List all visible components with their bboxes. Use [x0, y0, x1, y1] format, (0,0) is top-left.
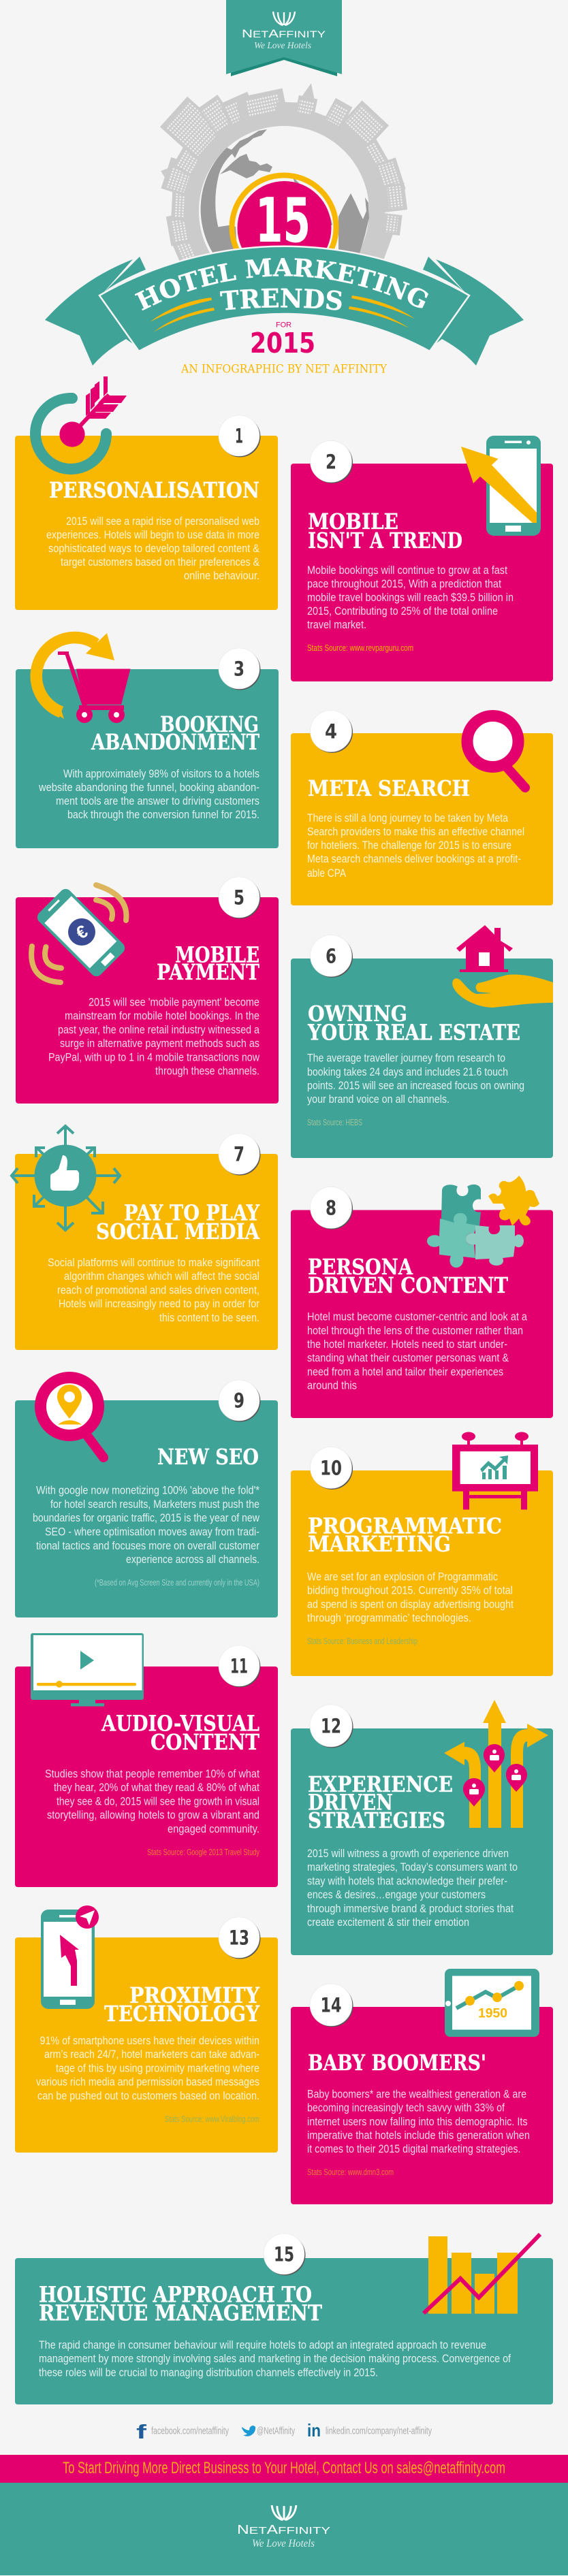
number badge 15: 15: [274, 2242, 294, 2266]
body text: sophisticated ways to develop tailored content &: [48, 543, 259, 555]
ribbon banner: [45, 245, 524, 366]
number badge 5: 5: [234, 886, 244, 909]
hero illustration: city ring and globe: [156, 81, 407, 312]
heading: PERSONA: [308, 1255, 413, 1280]
heading: BABY BOOMERS': [308, 2050, 486, 2076]
heading: SOCIAL MEDIA: [96, 1219, 259, 1244]
body text: [36, 2035, 259, 2102]
icon: tablet with chart: [445, 1969, 539, 2037]
heading: CONTENT: [151, 1730, 259, 1755]
heading: DRIVEN CONTENT: [308, 1273, 508, 1298]
social links row: @NetAffinity: [257, 2426, 295, 2437]
body text: [45, 1768, 259, 1835]
heading: PROGRAMMATIC: [308, 1514, 502, 1539]
body text: your brand voice on all channels.: [307, 1093, 449, 1106]
body text: internet users now falling into this demographic. Its: [307, 2116, 528, 2128]
heading: [101, 1711, 259, 1755]
body text: points. 2015 will see an increased focus on owning: [307, 1080, 524, 1092]
icon: tablet with chart: 1950: [478, 2007, 507, 2021]
body text: standing what their customer personas want &: [307, 1352, 509, 1364]
heading: MARKETING: [308, 1532, 451, 1557]
body text: Studies show that people remember 10% of what: [45, 1768, 259, 1780]
body text: tage of this by using proximity marketing where: [56, 2062, 259, 2074]
icon: magnifier: [467, 716, 525, 788]
heading: [39, 2283, 322, 2326]
number badge 9: 9: [234, 1389, 244, 1412]
panel 14: baby boomers: [291, 1969, 553, 2204]
body text: ment tools are the answer to driving customers: [56, 795, 259, 807]
number badge 2: [311, 441, 353, 483]
heading: [104, 1983, 259, 2027]
icon: puzzle pieces: [427, 1176, 539, 1268]
body text: Search providers to make this an effective channel: [307, 826, 524, 838]
body text: [33, 1485, 260, 1566]
heading: ABANDONMENT: [91, 730, 259, 755]
number badge 13: 13: [229, 1927, 249, 1950]
panel 2: mobile isn't a trend: [291, 436, 553, 681]
body text: various rich media and permission based messages: [36, 2076, 259, 2089]
body text: With google now monetizing 100% 'above the fold'*: [36, 1485, 260, 1497]
heading: META SEARCH: [308, 776, 470, 801]
badge: 15: [232, 176, 336, 279]
icon: logo fan: [273, 12, 295, 25]
body text: PayPal, with up to 1 in 4 mobile transactions now: [48, 1051, 259, 1063]
number badge 13: [219, 1917, 260, 1959]
body text: website abandoning the funnel, booking abandon-: [38, 782, 259, 794]
number badge 11: [219, 1645, 260, 1687]
body text: back through the conversion funnel for 2015.: [67, 809, 259, 821]
heading: PAY TO PLAY: [124, 1201, 259, 1225]
number badge 2: 2: [326, 451, 336, 474]
logo wordmark: N ET AFFINITY: [242, 27, 326, 40]
number badge 10: [311, 1447, 353, 1490]
icon: phone with arrow: [461, 436, 541, 536]
body text: online behaviour.: [184, 570, 259, 582]
icon: branching arrows with pins: [444, 1700, 548, 1828]
body text: experience across all channels.: [126, 1553, 259, 1566]
body text: marketing strategies, Today’s consumers want to: [307, 1861, 518, 1873]
body text: this content to be seen.: [159, 1312, 259, 1324]
globe continents: [201, 129, 369, 259]
heading: MOBILE: [308, 509, 398, 534]
number badge 9: [219, 1380, 260, 1421]
number badge 1: 1: [235, 425, 243, 448]
icon: tilted phone with euro: €: [72, 920, 91, 944]
number badge 12: [310, 1705, 353, 1748]
footer logo block: [0, 2483, 568, 2575]
number badge 3: 3: [234, 658, 244, 681]
subtitle: for: FOR: [276, 321, 291, 329]
body text: need from a hotel and tailor their experiences: [307, 1366, 503, 1378]
number badge 6: [311, 935, 353, 978]
body text: the hotel marketer. Hotels need to start under-: [307, 1338, 507, 1351]
body text: 91% of smartphone users have their devices within: [40, 2035, 259, 2047]
icon: twitter: [242, 2426, 255, 2436]
subtitle: 2015: 2015: [250, 327, 315, 359]
body text: for hoteliers. The challenge for 2015 is to ensure: [307, 839, 511, 852]
heading: PAYMENT: [157, 960, 259, 985]
heading: MOBILE: [175, 942, 259, 968]
number badge 8: 8: [326, 1197, 336, 1220]
icon: phone with navigation arrow: [41, 1905, 99, 2009]
body text: storytelling, allowing hotels to grow a vibrant and: [47, 1809, 259, 1822]
heading: TECHNOLOGY: [104, 2001, 259, 2027]
body text: through these channels.: [155, 1065, 259, 1077]
body text: past year, the online retail industry witnessed a: [58, 1024, 260, 1036]
icon: bar chart with trend line: [424, 2234, 540, 2314]
panel 4: meta search: [291, 711, 553, 905]
body text: [307, 1848, 518, 1929]
social links row: linkedin.com/company/net-affinity: [326, 2426, 432, 2437]
body text: algorithm changes which will affect the social: [64, 1270, 259, 1283]
body text: [307, 1571, 514, 1624]
body text: travel market.: [307, 619, 366, 631]
panel 10: programmatic marketing: [291, 1432, 553, 1676]
body text: [307, 1311, 528, 1392]
number badge 1: [219, 415, 260, 457]
icon: linkedin: in: [307, 2420, 321, 2441]
icon: target and arrow: [35, 376, 127, 469]
stats source: Stats Source: www.revparguru.com: [307, 643, 413, 653]
heading: OWNING: [308, 1001, 407, 1027]
body text: create excitement & stir their emotion: [307, 1916, 469, 1929]
body text: arm’s reach 24/7, hotel marketers can take advan-: [44, 2048, 259, 2061]
heading: HOLISTIC APPROACH TO: [39, 2283, 312, 2308]
number badge 14: 14: [320, 1993, 342, 2016]
panel 13: proximity technology: [15, 1905, 278, 2153]
number badge 11: 11: [230, 1654, 248, 1677]
panel 5: mobile payment: [16, 877, 279, 1104]
number badge 12: 12: [321, 1714, 341, 1737]
number badge 15: [264, 2234, 305, 2275]
heading: [308, 1255, 508, 1298]
body text: 2015 will witness a growth of experience driven: [307, 1848, 509, 1860]
body text: 2015 will see 'mobile payment' become: [89, 997, 259, 1009]
title: hotel marketing: [142, 276, 425, 311]
body text: [39, 2339, 511, 2379]
body text: Baby boomers* are the wealthiest generation & are: [307, 2088, 526, 2100]
heading: [157, 942, 259, 985]
body text: Hotel must become customer-centric and look at a: [307, 1311, 528, 1323]
heading: REVENUE MANAGEMENT: [39, 2301, 322, 2326]
body text: Hotels will increasingly need to pay in order for: [59, 1298, 259, 1310]
body text: becoming increasingly tech savvy with 33% of: [307, 2102, 505, 2114]
heading: AUDIO-VISUAL: [101, 1711, 259, 1736]
number badge 4: [311, 711, 353, 753]
body text: target customers based on their preferences &: [61, 556, 259, 568]
body text: around this: [307, 1380, 357, 1392]
body text: pace throughout 2015, With a prediction that: [307, 578, 501, 590]
ribbon banner: TRENDS: [219, 289, 342, 310]
stats source: Stats Source: Business and Leadership: [307, 1637, 417, 1646]
body text: surge in alternative payment methods such as: [60, 1037, 259, 1050]
body text: [38, 768, 259, 821]
body text: boundaries for organic traffic, 2015 is the year of new: [33, 1512, 259, 1524]
number badge 5: [219, 877, 260, 919]
body text: The average traveller journey from research to: [307, 1052, 505, 1065]
body text: for hotel search results, Marketers must push the: [50, 1498, 259, 1511]
body text: [307, 812, 524, 880]
icon: video monitor: [31, 1633, 144, 1706]
body text: it comes to their 2015 digital marketing strategies.: [307, 2143, 520, 2155]
body text: Social platforms will continue to make significant: [48, 1257, 259, 1269]
body text: imperative that hotels include this generation when: [307, 2129, 530, 2142]
panel 3: booking abandonment: [16, 633, 279, 848]
body text: they see & do, 2015 will see the growth in visual: [57, 1795, 259, 1807]
ribbon banner: HOTEL MARKETING: [135, 258, 428, 310]
icon: house on hand: [452, 925, 553, 1008]
body text: experiences. Hotels will begin to use data in more: [46, 529, 259, 541]
body text: hotel through the lens of the customer rather than: [307, 1325, 523, 1337]
body text: can be pushed out to customers based on location.: [37, 2090, 259, 2102]
body text: they hear, 20% of what they read & 80% of what: [54, 1782, 259, 1794]
heading: YOUR REAL ESTATE: [307, 1020, 520, 1046]
number badge 3: [219, 648, 260, 690]
number badge 6: 6: [326, 945, 336, 968]
body text: tional tactics and focuses more on overall customer: [36, 1540, 259, 1552]
footnote: (*Based on Avg Screen Size and currently only in the USA): [95, 1578, 259, 1588]
body text: [307, 564, 514, 631]
number badge 7: 7: [234, 1142, 244, 1165]
body text: Meta search channels deliver bookings at a profit-: [307, 853, 521, 865]
heading: [91, 712, 259, 755]
panel 12: experience driven strategies: [291, 1700, 553, 1955]
panel 1: personalisation: [15, 376, 278, 610]
body text: [307, 2088, 530, 2155]
icon: thumbs up with arrows: [11, 1125, 121, 1231]
logo wordmark: N ET A FFINITY: [237, 2523, 330, 2537]
social links row: [136, 2420, 432, 2443]
icon: tilted phone with euro: [31, 885, 127, 982]
body text: reach of promotional and sales driven content,: [57, 1284, 259, 1296]
body text: through ‘programmatic’ technologies.: [307, 1612, 471, 1624]
number badge 14: [310, 1984, 353, 2027]
number badge 10: 10: [320, 1457, 342, 1480]
body text: The rapid change in consumer behaviour will require hotels to adopt an integrated approach to revenue: [39, 2339, 486, 2351]
panel 7: pay to play social media: [11, 1125, 278, 1350]
panel 9: new seo: [15, 1378, 278, 1617]
heading: PROXIMITY: [129, 1983, 259, 2008]
body text: management by more strongly involving sales and marketing in the decision making process. Convergence of: [39, 2353, 511, 2365]
number badge 8: [311, 1187, 353, 1229]
heading: PERSONALISATION: [49, 478, 259, 503]
logo tagline: We Love Hotels: [254, 41, 312, 51]
stats source: Stats Source: Google 2013 Travel Study: [147, 1848, 260, 1857]
panel 6: owning your real estate: [291, 925, 553, 1158]
icon: cart with return arrow: [36, 633, 130, 723]
icon: facebook: f: [136, 2421, 147, 2443]
panel 15: holistic approach to revenue management: [15, 2234, 553, 2404]
title: trends: [221, 308, 343, 310]
body text: We are set for an explosion of Programmatic: [307, 1571, 498, 1583]
heading: [308, 1514, 502, 1557]
number badge 4: 4: [325, 720, 337, 743]
stats source: Stats Source: HEBS: [307, 1118, 362, 1127]
heading: EXPERIENCE: [308, 1772, 453, 1797]
body text: 2015 will see a rapid rise of personalised web: [66, 515, 259, 528]
body text: [46, 515, 259, 582]
body text: mobile travel bookings will reach $39.5 billion in: [307, 592, 514, 604]
body text: 2015, Contributing to 25% of the total online: [307, 605, 498, 617]
body text: [307, 1052, 524, 1106]
logo tagline: We Love Hotels: [252, 2538, 315, 2549]
stats source: Stats Source: www.dmn3.com: [307, 2168, 394, 2177]
body text: ad spend is spent on display advertising bought: [307, 1598, 514, 1611]
body text: engaged community.: [168, 1823, 259, 1835]
body text: these roles will be crucial to managing distribution channels effectively in 2015.: [39, 2366, 378, 2379]
body text: booking takes 24 days and includes 21.6 touch: [307, 1066, 508, 1078]
heading: BOOKING: [160, 712, 259, 737]
body text: There is still a long journey to be taken by Meta: [307, 812, 509, 824]
icon: magnifier with pin: [41, 1378, 104, 1458]
body text: Mobile bookings will continue to grow at a fast: [307, 564, 507, 577]
body text: SEO - where optimisation moves away from tradi-: [45, 1526, 259, 1539]
panel 11: audio-visual content: [15, 1633, 278, 1887]
body text: stay with hotels that acknowledge their prefer-: [307, 1875, 507, 1887]
subtitle: by net affinity: AN INFOGRAPHIC BY NET AFFINITY: [180, 362, 388, 376]
heading: [307, 1001, 520, 1046]
number badge 7: [219, 1133, 260, 1175]
heading: [96, 1201, 259, 1244]
body text: bidding throughout 2015. Currently 35% of total: [307, 1585, 513, 1597]
stats source: Stats Source: www.Viralblog.com: [165, 2114, 259, 2124]
body text: [48, 997, 260, 1077]
top logo banner: [226, 0, 342, 76]
heading: [308, 1772, 453, 1833]
body text: mainstream for mobile hotel bookings. In the: [65, 1010, 259, 1023]
body text: through immersive brand & product stories that: [307, 1903, 514, 1915]
heading: STRATEGIES: [308, 1808, 445, 1833]
badge: 15: 15: [255, 185, 311, 257]
icon: logo fan: [272, 2505, 296, 2520]
heading: DRIVEN: [308, 1790, 393, 1816]
panel 8: persona driven content: [291, 1176, 553, 1418]
body text: able CPA: [307, 867, 346, 880]
social links row: facebook.com/netaffinity: [151, 2426, 229, 2437]
call to action bar: [0, 2455, 568, 2483]
heading: [308, 509, 462, 553]
body text: [48, 1257, 259, 1324]
icon: billboard chart: [452, 1432, 538, 1510]
heading: NEW SEO: [157, 1445, 259, 1470]
heading: ISN'T A TREND: [308, 528, 462, 553]
ribbon gold swooshes: [150, 295, 415, 332]
body text: ences & desires…engage your customers: [307, 1889, 486, 1901]
body text: With approximately 98% of visitors to a hotels: [63, 768, 259, 780]
